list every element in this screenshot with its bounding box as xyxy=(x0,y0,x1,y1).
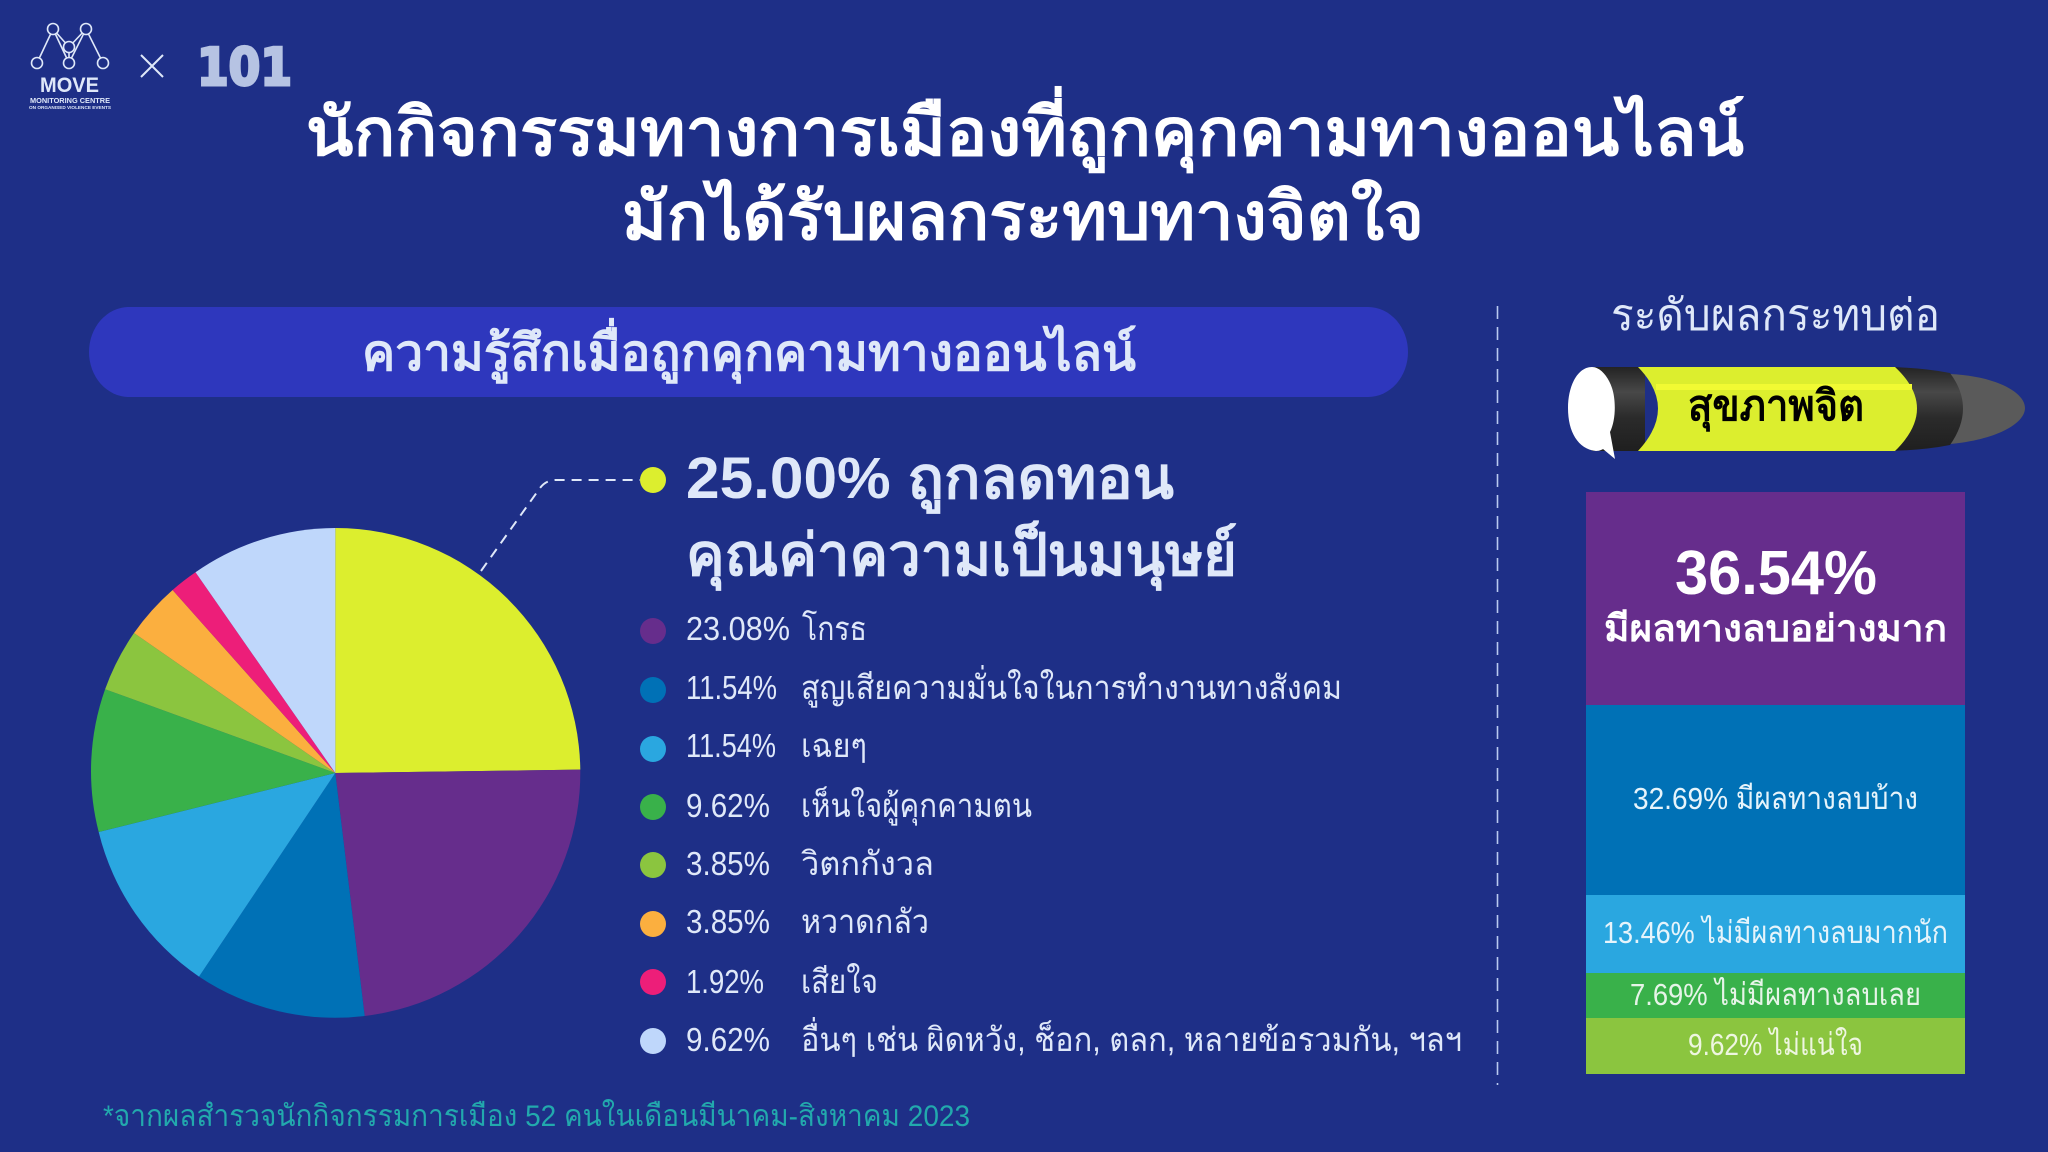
legend: 9.62% sympathy xyxy=(640,786,1032,826)
legend: 9.62% sympathy: 9.62% xyxy=(686,787,770,824)
bar segment: 7.69% no negative effect: 7.69% ไม่มีผลทางลบเลย xyxy=(1630,977,1921,1012)
legend: 3.85% worried: 3.85% xyxy=(686,845,770,882)
legend: 9.62% others: 9.62% xyxy=(686,1021,770,1058)
legend: 9.62% others xyxy=(640,1017,1462,1058)
bar segment: 32.69% somewhat negative xyxy=(1586,705,1965,895)
icon: pencil with mental health label: สุขภาพจิต xyxy=(1688,382,1864,432)
legend: 11.54% indifferent: 11.54% xyxy=(686,727,776,764)
title xyxy=(306,85,1745,253)
legend: top item 25.00%: 25.00% ถูกลดทอน xyxy=(686,446,1174,514)
bar segment: 9.62% unsure xyxy=(1586,1018,1965,1074)
stacked bar: mental health impact levels xyxy=(1586,492,1965,1074)
legend: 3.85% afraid xyxy=(640,903,929,940)
bar segment: 36.54% very negative: 36.54% xyxy=(1675,539,1877,608)
panel: feelings heading pill xyxy=(89,307,1408,397)
bar segment: 7.69% no negative effect xyxy=(1586,973,1965,1018)
legend: 11.54% indifferent xyxy=(640,727,867,764)
legend: 23.08%: 23.08% xyxy=(686,610,790,647)
bar segment: 13.46% not very negative xyxy=(1586,895,1965,973)
title: มักได้รับผลกระทบทางจิตใจ xyxy=(622,177,1424,253)
footnote: *จากผลสำรวจนักกิจกรรมการเมือง 52 คนในเดือนมีนาคม-สิงหาคม 2023 xyxy=(103,1099,970,1133)
legend: top item 25.00%: คุณค่าความเป็นมนุษย์ xyxy=(686,520,1237,592)
title: นักกิจกรรมทางการเมืองที่ถูกคุกคามทางออนไลน์ xyxy=(306,85,1745,174)
logo: MOVE monitoring centre: MONITORING CENTRE xyxy=(30,96,110,105)
icon: pencil with mental health label xyxy=(1568,367,2025,459)
legend: 1.92% sad: เสียใจ xyxy=(801,963,878,1000)
logo: MOVE monitoring centre: MOVE xyxy=(40,74,99,97)
logo: MOVE monitoring centre xyxy=(29,24,111,110)
legend: 9.62% sympathy: เห็นใจผู้คุกคามตน xyxy=(801,786,1032,826)
legend: 23.08%: โกรธ xyxy=(802,610,867,647)
legend: 3.85% worried: วิตกกังวล xyxy=(801,845,934,882)
pie chart xyxy=(91,528,580,1018)
bar segment: 32.69% somewhat negative: 32.69% มีผลทางลบบ้าง xyxy=(1633,781,1918,816)
leader line from pie to top legend item xyxy=(481,480,640,571)
logo: MOVE monitoring centre: ON ORGANISED VIOLENCE EVENTS xyxy=(29,105,111,110)
bar segment: 13.46% not very negative: 13.46% ไม่มีผลทางลบมากนัก xyxy=(1603,915,1948,950)
legend: 11.54% loss of confidence xyxy=(640,665,1342,708)
legend: 11.54% indifferent: เฉยๆ xyxy=(801,727,867,764)
icon: times sign between logos xyxy=(141,55,163,77)
legend: 11.54% loss of confidence: สูญเสียความมั่นใจในการทำงานทางสังคม xyxy=(801,665,1342,708)
legend: 1.92% sad xyxy=(640,963,878,1000)
legend: 9.62% others: อื่นๆ เช่น ผิดหวัง, ช็อก, ตลก, หลายข้อรวมกัน, ฯลฯ xyxy=(801,1017,1462,1058)
bar segment: 36.54% very negative: มีผลทางลบอย่างมาก xyxy=(1604,608,1947,649)
legend: 3.85% afraid: 3.85% xyxy=(686,903,770,940)
bar segment: 9.62% unsure: 9.62% ไม่แน่ใจ xyxy=(1688,1027,1863,1062)
logo: 101: 101 xyxy=(197,38,292,98)
legend: 3.85% worried xyxy=(640,845,934,882)
legend: 23.08% xyxy=(640,610,867,647)
legend: 3.85% afraid: หวาดกลัว xyxy=(801,903,929,940)
legend: 1.92% sad: 1.92% xyxy=(686,963,764,1000)
heading: impact level: ระดับผลกระทบต่อ xyxy=(1611,291,1940,340)
legend: 11.54% loss of confidence: 11.54% xyxy=(686,669,777,706)
legend: top item 25.00% xyxy=(640,446,1237,592)
panel: feelings heading pill: ความรู้สึกเมื่อถูกคุกคามทางออนไลน์ xyxy=(362,318,1137,384)
bar segment: 36.54% very negative xyxy=(1586,492,1965,705)
